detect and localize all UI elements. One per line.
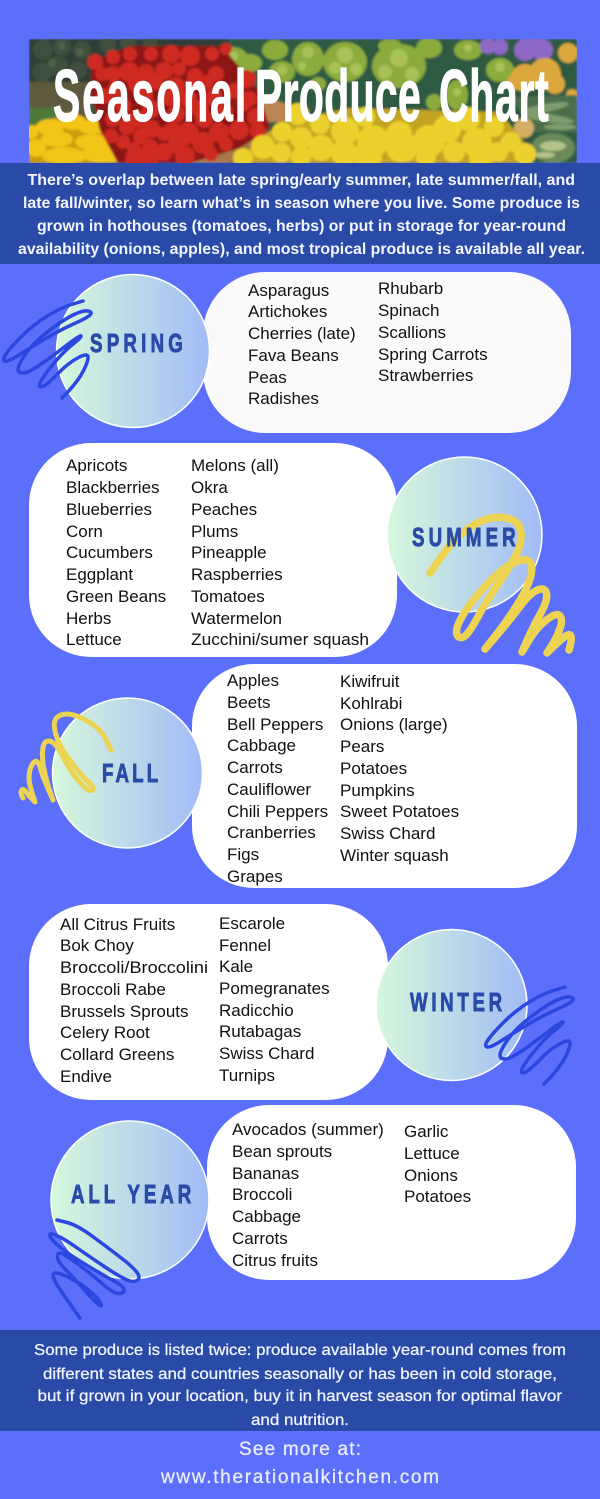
panel: all year xyxy=(50,1105,576,1318)
spring produce column one xyxy=(248,281,356,408)
header photo: produce market stalls xyxy=(29,39,577,163)
fall produce column one: Apples xyxy=(227,671,279,690)
fall produce column two xyxy=(340,672,459,865)
summer heading: SUMMER xyxy=(412,522,516,552)
all year produce column two: Lettuce xyxy=(404,1144,460,1163)
title xyxy=(53,54,549,137)
icon: yellow scribble xyxy=(21,714,111,802)
panel: spring xyxy=(4,272,571,433)
fall produce column two: Pears xyxy=(340,737,384,756)
winter produce column two: Swiss Chard xyxy=(219,1044,314,1063)
romanesco xyxy=(218,38,514,110)
winter produce column one: Collard Greens xyxy=(60,1045,174,1064)
fall produce column two: Swiss Chard xyxy=(340,824,435,843)
icon: blue scribble xyxy=(4,301,91,398)
title: Seasonal xyxy=(53,54,246,137)
title: Chart xyxy=(439,54,549,137)
all year produce column one: Avocados (summer) xyxy=(232,1120,384,1139)
all year produce column two: Garlic xyxy=(404,1122,449,1141)
fall produce column two: Kohlrabi xyxy=(340,694,402,713)
winter produce column one: All Citrus Fruits xyxy=(60,915,175,934)
summer produce column two xyxy=(191,456,369,649)
all year produce column one xyxy=(232,1120,384,1270)
bottom note text: but if grown in your location, buy it in harvest season for optimal flavor xyxy=(38,1388,563,1405)
winter produce column two: Kale xyxy=(219,957,253,976)
spring produce column two: Scallions xyxy=(378,323,446,342)
winter produce column two: Rutabagas xyxy=(219,1022,301,1041)
all year produce column one: Broccoli xyxy=(232,1185,292,1204)
fall produce column one: Carrots xyxy=(227,758,283,777)
summer produce column one: Lettuce xyxy=(66,630,122,649)
winter produce column one: Broccoli/Broccolini xyxy=(60,958,208,977)
winter produce column one: Broccoli Rabe xyxy=(60,980,166,999)
spring produce column one: Radishes xyxy=(248,389,319,408)
peppers xyxy=(29,110,120,163)
fall produce column one: Figs xyxy=(227,845,259,864)
all year produce column two xyxy=(404,1122,471,1206)
summer produce column two: Plums xyxy=(191,522,238,541)
intro band xyxy=(0,163,600,264)
summer produce column two: Raspberries xyxy=(191,565,283,584)
spring produce column one: Artichokes xyxy=(248,302,327,321)
footer link: See more at: xyxy=(239,1439,361,1460)
summer produce column one: Green Beans xyxy=(66,587,166,606)
summer produce column two: Okra xyxy=(191,478,228,497)
tomatoes xyxy=(90,46,270,163)
summer produce column one: Apricots xyxy=(66,456,127,475)
spring produce column two: Spring Carrots xyxy=(378,345,488,364)
winter produce column one: Bok Choy xyxy=(60,936,134,955)
fall produce column two: Winter squash xyxy=(340,846,449,865)
all year produce column one: Bananas xyxy=(232,1164,299,1183)
winter produce column one: Endive xyxy=(60,1067,112,1086)
spring list card xyxy=(203,272,571,433)
all year badge circle xyxy=(51,1121,209,1279)
panel: fall xyxy=(21,664,577,888)
summer produce column one: Corn xyxy=(66,522,103,541)
all year produce column one: Bean sprouts xyxy=(232,1142,332,1161)
fall produce column one: Cauliflower xyxy=(227,780,311,799)
summer list card xyxy=(29,443,397,657)
bottom note text xyxy=(34,1342,566,1429)
fall produce column one: Chili Peppers xyxy=(227,802,328,821)
spring produce column two: Spinach xyxy=(378,301,439,320)
winter produce column two: Escarole xyxy=(219,914,285,933)
summer produce column two: Zucchini/sumer squash xyxy=(191,630,369,649)
bottom note band xyxy=(0,1330,600,1431)
fall produce column two: Potatoes xyxy=(340,759,407,778)
fall produce column two: Kiwifruit xyxy=(340,672,400,691)
all year list card xyxy=(207,1105,576,1280)
all year produce column two: Potatoes xyxy=(404,1187,471,1206)
icon: blue scribble xyxy=(50,1220,139,1318)
bottom note text: different states and countries seasonally or has been in cold storage, xyxy=(43,1366,557,1383)
intro text: late fall/winter, so learn what’s in season where you live. Some produce is xyxy=(23,195,580,212)
bottom note text: and nutrition. xyxy=(251,1412,349,1429)
intro text: There’s overlap between late spring/early summer, late summer/fall, and xyxy=(28,172,575,189)
summer produce column two: Melons (all) xyxy=(191,456,279,475)
fall heading: FALL xyxy=(102,758,158,788)
summer produce column one: Blueberries xyxy=(66,500,152,519)
fall produce column one: Bell Peppers xyxy=(227,715,323,734)
intro text: availability (onions, apples), and most tropical produce is available all year. xyxy=(18,241,585,258)
all year heading: ALL YEAR xyxy=(71,1179,191,1209)
spring produce column two: Rhubarb xyxy=(378,279,443,298)
purple and orange cauliflower xyxy=(480,36,553,61)
winter produce column two: Radicchio xyxy=(219,1001,294,1020)
fall produce column one: Beets xyxy=(227,693,270,712)
summer produce column one xyxy=(66,456,166,649)
fall list card xyxy=(192,664,577,888)
icon: blue scribble xyxy=(486,987,573,1084)
fall produce column two: Sweet Potatoes xyxy=(340,802,459,821)
fall produce column two: Pumpkins xyxy=(340,781,415,800)
winter badge circle xyxy=(376,930,527,1080)
lemons xyxy=(235,108,530,163)
winter produce column two: Turnips xyxy=(219,1066,275,1085)
spring produce column one: Peas xyxy=(248,368,287,387)
intro text xyxy=(18,172,585,258)
spring heading: SPRING xyxy=(90,328,183,358)
all year produce column one: Carrots xyxy=(232,1229,288,1248)
summer produce column two: Peaches xyxy=(191,500,257,519)
spring produce column one: Fava Beans xyxy=(248,346,339,365)
summer produce column two: Tomatoes xyxy=(191,587,265,606)
fall produce column one xyxy=(227,671,328,886)
winter produce column one: Brussels Sprouts xyxy=(60,1002,188,1021)
spring produce column one: Cherries (late) xyxy=(248,324,356,343)
spring produce column one: Asparagus xyxy=(248,281,329,300)
footer link xyxy=(160,1439,439,1488)
all year produce column one: Citrus fruits xyxy=(232,1251,318,1270)
icon: yellow scribble xyxy=(430,517,571,653)
fall produce column two: Onions (large) xyxy=(340,715,448,734)
bottom note text: Some produce is listed twice: produce available year-round comes from xyxy=(34,1342,566,1359)
winter list card xyxy=(29,904,388,1100)
green beans and cabbage xyxy=(510,95,577,132)
summer produce column two: Pineapple xyxy=(191,543,267,562)
winter produce column two xyxy=(219,914,330,1085)
fall produce column one: Cranberries xyxy=(227,823,316,842)
all year produce column two: Onions xyxy=(404,1166,458,1185)
intro text: grown in hothouses (tomatoes, herbs) or put in storage for year-round xyxy=(37,218,566,235)
summer produce column one: Eggplant xyxy=(66,565,133,584)
all year produce column one: Cabbage xyxy=(232,1207,301,1226)
winter produce column one xyxy=(60,915,208,1086)
summer produce column two: Watermelon xyxy=(191,609,282,628)
winter heading: WINTER xyxy=(410,987,502,1017)
spring produce column two xyxy=(378,279,488,385)
fall produce column one: Grapes xyxy=(227,867,283,886)
winter produce column two: Fennel xyxy=(219,936,271,955)
winter produce column one: Celery Root xyxy=(60,1023,150,1042)
panel: summer xyxy=(29,443,571,657)
fall badge circle xyxy=(52,698,202,848)
winter produce column two: Pomegranates xyxy=(219,979,330,998)
summer badge circle xyxy=(387,457,542,612)
spring badge circle xyxy=(56,274,210,428)
panel: winter xyxy=(29,904,573,1100)
title: Produce xyxy=(255,54,421,137)
spring produce column two: Strawberries xyxy=(378,366,473,385)
footer link: www.therationalkitchen.com xyxy=(160,1467,439,1488)
summer produce column one: Blackberries xyxy=(66,478,160,497)
summer produce column one: Cucumbers xyxy=(66,543,153,562)
summer produce column one: Herbs xyxy=(66,609,111,628)
fall produce column one: Cabbage xyxy=(227,736,296,755)
